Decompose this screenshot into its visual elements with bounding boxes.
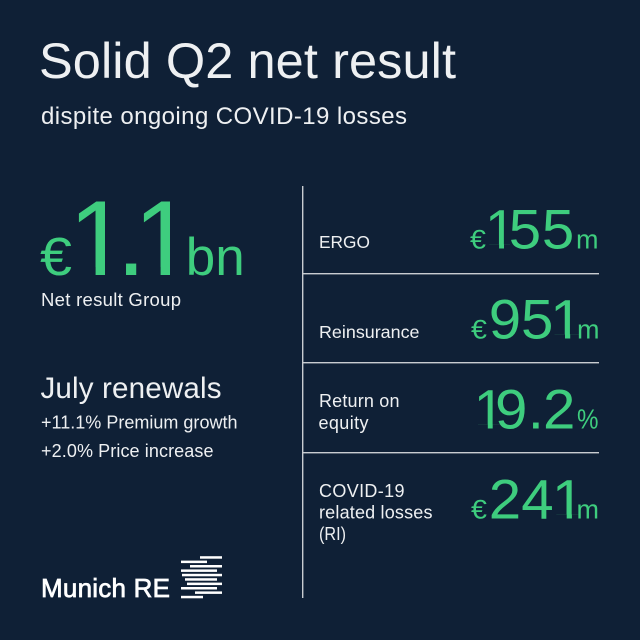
subtitle: dispite ongoing COVID-19 losses	[41, 103, 407, 130]
panel: Return on equity: Return on	[319, 391, 400, 411]
panel: COVID-19 related losses: COVID-19	[319, 481, 404, 501]
panel: COVID-19 related losses	[320, 480, 598, 544]
panel: Reinsurance: m	[577, 314, 600, 344]
panel: COVID-19 related losses: m	[576, 494, 599, 524]
panel: ERGO: 1	[485, 198, 516, 260]
headline figure: net result group	[40, 202, 242, 276]
panel: COVID-19 related losses: (RI)	[319, 524, 346, 544]
panel: Return on equity: 9.2	[495, 379, 575, 441]
headline figure: net result group: €	[40, 227, 72, 287]
panel: Return on equity	[319, 390, 598, 433]
panel: Return on equity: 1	[474, 378, 505, 440]
panel: ERGO: ERGO	[319, 232, 370, 252]
panel: Reinsurance: 951	[489, 289, 583, 351]
panel: ERGO: €	[470, 224, 486, 254]
vertical divider	[302, 186, 303, 598]
panel: COVID-19 related losses: 241	[489, 469, 584, 531]
headline figure: net result group: 1.1	[69, 178, 193, 298]
panel: ERGO: 55	[509, 199, 574, 261]
text: premium growth: +11.1% Premium growth	[41, 412, 238, 432]
panel: Return on equity: equity	[318, 413, 368, 433]
logo: Munich RE: Munich RE	[41, 573, 170, 603]
panel: Return on equity: %	[577, 404, 598, 434]
panel: Reinsurance: €	[471, 314, 487, 344]
panel: ERGO: m	[576, 224, 598, 254]
headline figure: net result group: bn	[186, 228, 245, 287]
text: price increase: +2.0% Price increase	[41, 441, 214, 461]
panel: COVID-19 related losses: related losses	[319, 502, 432, 522]
heading: July renewals: July renewals	[40, 372, 222, 405]
infographic canvas	[40, 42, 599, 598]
logo: Munich RE	[41, 556, 222, 603]
panel: ERGO	[320, 210, 597, 249]
label: net result group: Net result Group	[41, 289, 181, 310]
panel: Reinsurance: Reinsurance	[319, 322, 420, 342]
panel: COVID-19 related losses: €	[471, 494, 487, 524]
title: Solid Q2 net result	[39, 32, 456, 89]
panel: Reinsurance	[320, 300, 598, 339]
